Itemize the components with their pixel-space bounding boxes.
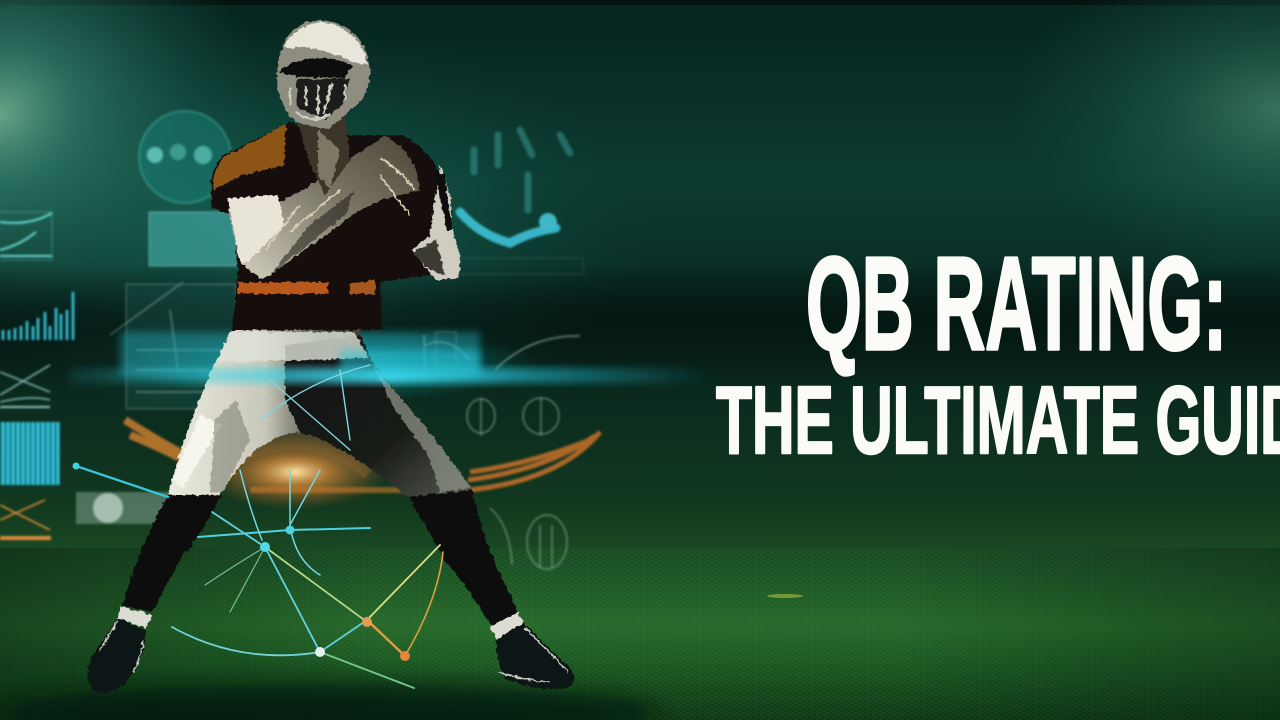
back leg and cleat (left) (88, 493, 222, 692)
small line chart (424, 335, 580, 375)
circular gauge (139, 111, 231, 203)
pants (168, 330, 472, 497)
cyan splash (460, 212, 556, 243)
bar chart (3, 292, 73, 340)
sketched circles (467, 398, 567, 569)
support arm (412, 165, 460, 280)
data panels: left charts (0, 212, 73, 538)
grass field (0, 548, 1280, 720)
helmet (277, 20, 370, 130)
line chart top (0, 212, 52, 260)
stripe chart (0, 422, 60, 485)
data panels: center (76, 212, 239, 524)
cyan glow over waist (70, 350, 710, 383)
throwing arm (228, 136, 420, 280)
blurred data cluster (474, 130, 570, 210)
cyan light streak (120, 329, 540, 401)
orange swooshes (125, 420, 600, 510)
quarterback (88, 20, 574, 692)
orange line chart (0, 500, 51, 538)
title (716, 230, 1280, 474)
jersey (211, 122, 452, 330)
line chart middle (0, 365, 50, 407)
front leg and cleat (right) (408, 490, 574, 689)
neck (295, 115, 350, 195)
data panels: right (424, 130, 583, 569)
play diagram (72, 365, 443, 688)
